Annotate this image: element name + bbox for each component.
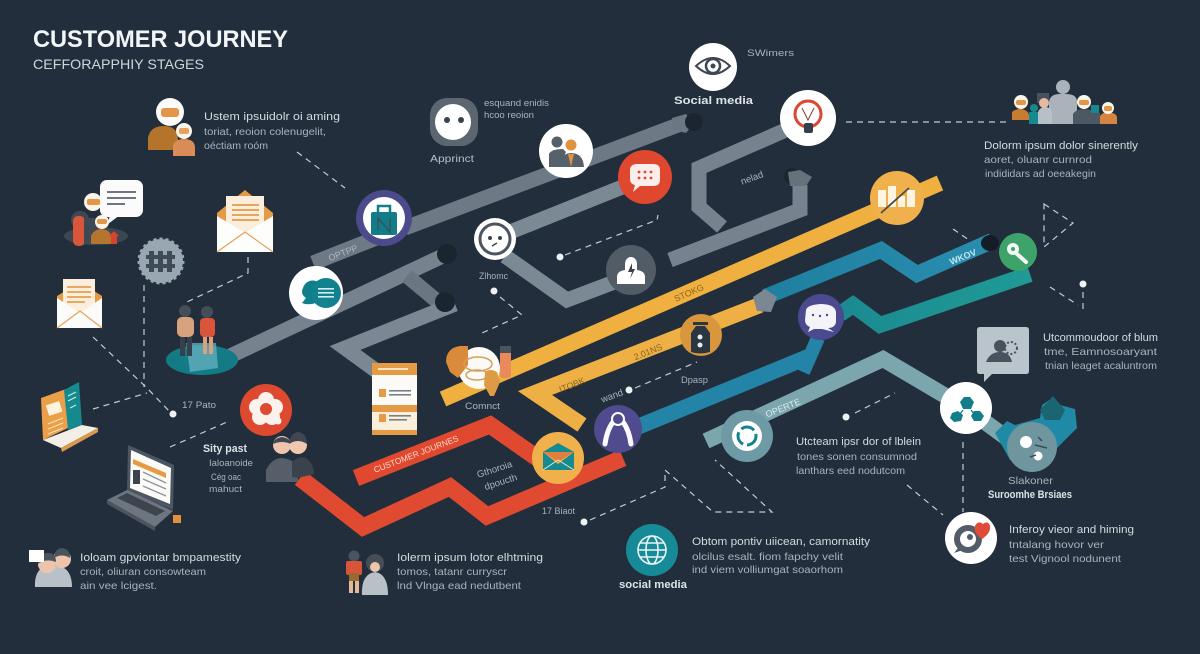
text: small note by badge (484, 98, 549, 121)
text: top left note: toriat, reoion colenugelit, (204, 126, 326, 138)
path: upper gray route (313, 122, 686, 263)
dashed connectors (93, 122, 1083, 520)
text: bottom center note (397, 552, 543, 592)
connector end dots (170, 254, 1086, 526)
text: social note: Obtom pontiv uiicean, camornatity (692, 536, 871, 548)
text: small note by badge: esquand enidis (484, 98, 549, 109)
band label: route one: OPTPP (327, 243, 359, 263)
text: bottom left note: Ioloam gpviontar bmpamestity (80, 552, 242, 564)
icon: green key circle (999, 233, 1037, 271)
icon: laptop (107, 445, 181, 531)
path: bulb gray route (670, 126, 800, 260)
icon: document card (372, 363, 417, 435)
text: rotated note: Gthoroia (476, 459, 514, 481)
label: Dpasp: Dpasp (681, 375, 708, 386)
text: middle note: tones sonen consumnod (797, 451, 917, 463)
icon: people pair red route (266, 432, 314, 482)
path: yellow route one (443, 183, 940, 399)
text: right note: Utcommoudoor of blum (1043, 332, 1158, 344)
icon: red flower circle (240, 384, 292, 436)
icon: bulb circle (780, 90, 836, 146)
icon: network circle (940, 382, 992, 434)
text: top left note (204, 111, 340, 152)
text: bottom center note: lnd Vlnga ead nedutbent (397, 580, 521, 592)
text: top right note: indididars ad oeeakegin (985, 168, 1096, 180)
path: red lower route (300, 458, 623, 527)
label: social media bottom: social media (619, 579, 688, 591)
text: top right note: aoret, oluanr curnrod (984, 154, 1092, 166)
path: red upper route (356, 425, 540, 478)
path knots (435, 113, 999, 312)
label: 17 Biaot: 17 Biaot (542, 506, 575, 517)
label: wand: wand (599, 387, 625, 406)
band label: customer journey: CUSTOMER JOURNES (372, 433, 460, 475)
band label: ITOBK: ITOBK (558, 375, 586, 395)
path: teal route (840, 274, 1030, 325)
text: top left note: Ustem ipsuidolr oi aming (204, 111, 340, 123)
path: lower gray route from platform (228, 254, 455, 372)
band label: STOKG: STOKG (673, 282, 705, 304)
icon: brochure (41, 382, 98, 452)
text: rotated note (476, 459, 519, 494)
text: top left note: oéctiam roóm (204, 140, 268, 152)
icon: heart circle (945, 512, 997, 564)
icon: lock circle (606, 245, 656, 295)
text: heart note (1009, 524, 1134, 565)
path: blue lower route (635, 357, 808, 428)
icon: speech tile (977, 327, 1029, 382)
subtitle: CEFFORAPPHIY STAGES (33, 56, 204, 72)
label: Zlhomc: Zlhomc (479, 271, 508, 282)
text: Sity past (203, 443, 253, 495)
text: middle note: Utcteam ipsr dor of lblein (796, 436, 921, 448)
icon: eye circle (689, 43, 737, 91)
text: small note by badge: hcoo reoion (484, 110, 534, 121)
label: Apprinct: Apprinct (430, 154, 474, 165)
path: light teal route (706, 359, 1030, 455)
icon: people circle (539, 124, 593, 178)
label: SWimers: SWimers (747, 48, 794, 59)
icon: small envelope (57, 279, 102, 328)
text: right note (1043, 332, 1158, 372)
text: right note: tme, Eamnosoaryant (1044, 346, 1157, 358)
icon: teal loop circle (721, 410, 773, 462)
icon: suitcase circle (356, 190, 412, 246)
path: central gray route (505, 180, 640, 300)
icon: bottle circle (680, 314, 722, 356)
icon: appoint face badge (430, 98, 478, 146)
band label: 2.01NS: 2.01NS (632, 342, 664, 362)
path: blue upper route (765, 241, 992, 297)
text: top right note (984, 140, 1139, 180)
text: rotated note: dpoucth (483, 472, 519, 493)
icon: envelope yellow circle (532, 432, 584, 484)
band label: nelad: nelad (739, 169, 765, 188)
text: right note: tnian leaget acaluntrom (1045, 360, 1157, 372)
icon: people bottom left (29, 548, 72, 587)
text: heart note: Inferoy vieor and himing (1009, 524, 1134, 536)
text: social note: olcilus esalt. fiom fapchy velit (692, 551, 843, 563)
icon: face circle (474, 218, 516, 260)
text: bottom left note (80, 552, 242, 592)
icon: people on platform (166, 305, 238, 375)
text: bottom left note: croit, oliuran consowteam (80, 566, 206, 578)
icon: people pair top left (148, 98, 195, 156)
path: blue link to chat (803, 338, 818, 372)
icon: purple arch circle (594, 405, 642, 453)
icon: gray teal circle (1007, 422, 1057, 472)
text: Slakoner: Slakoner (1008, 475, 1054, 487)
icon: open envelope (217, 190, 273, 252)
icon: teal blobs behind circle (995, 396, 1077, 460)
text: Sity past: Ialoanoide (209, 458, 253, 469)
text: Sity past: mahuct (209, 484, 242, 495)
text: social note: ind viem volliumgat soaorhom (692, 564, 843, 576)
icon: purple chat circle (798, 294, 844, 340)
band label: WKOV: WKOV (948, 247, 978, 267)
icon: chat bubble white circle (289, 266, 343, 320)
text: Sity past: Sity past (203, 443, 247, 455)
text: heart note: tntalang hovor ver (1009, 539, 1105, 551)
text: bottom left note: ain vee lcigest. (80, 580, 157, 592)
text: bottom center note: Iolerm ipsum lotor elhtming (397, 552, 543, 564)
icon: chat group (64, 180, 143, 246)
icon: comment cluster (446, 346, 511, 396)
text: middle note: lanthars eed nodutcom (796, 465, 905, 477)
text: bottom center note: tomos, tatanr curryscr (397, 566, 508, 578)
text: heart note: test Vignool nodunent (1009, 553, 1121, 565)
text: top right note: Dolorm ipsum dolor sinerently (984, 140, 1139, 152)
path: yellow route two (535, 305, 760, 425)
text: Slakoner (988, 475, 1072, 501)
icon: people group (1012, 80, 1117, 124)
text: middle note (796, 436, 921, 477)
icon: red chat circle (618, 150, 672, 204)
text: Sity past: Cég oac (211, 472, 241, 483)
label: Social media top: Social media (674, 95, 754, 107)
band label: OPERTE: OPERTE (764, 396, 802, 420)
title: CUSTOMER JOURNEY (33, 26, 288, 53)
text: social note (692, 536, 871, 576)
icon: yellow chart circle (870, 171, 924, 225)
label: 17 Pato: 17 Pato (182, 400, 216, 411)
icon: globe circle (626, 524, 678, 576)
label: Comnct: Comnct (465, 401, 500, 412)
icon: people bottom center (346, 550, 388, 595)
icon: gear badge (139, 239, 183, 283)
text: Slakoner: Suroomhe Brsiaes (988, 489, 1072, 501)
